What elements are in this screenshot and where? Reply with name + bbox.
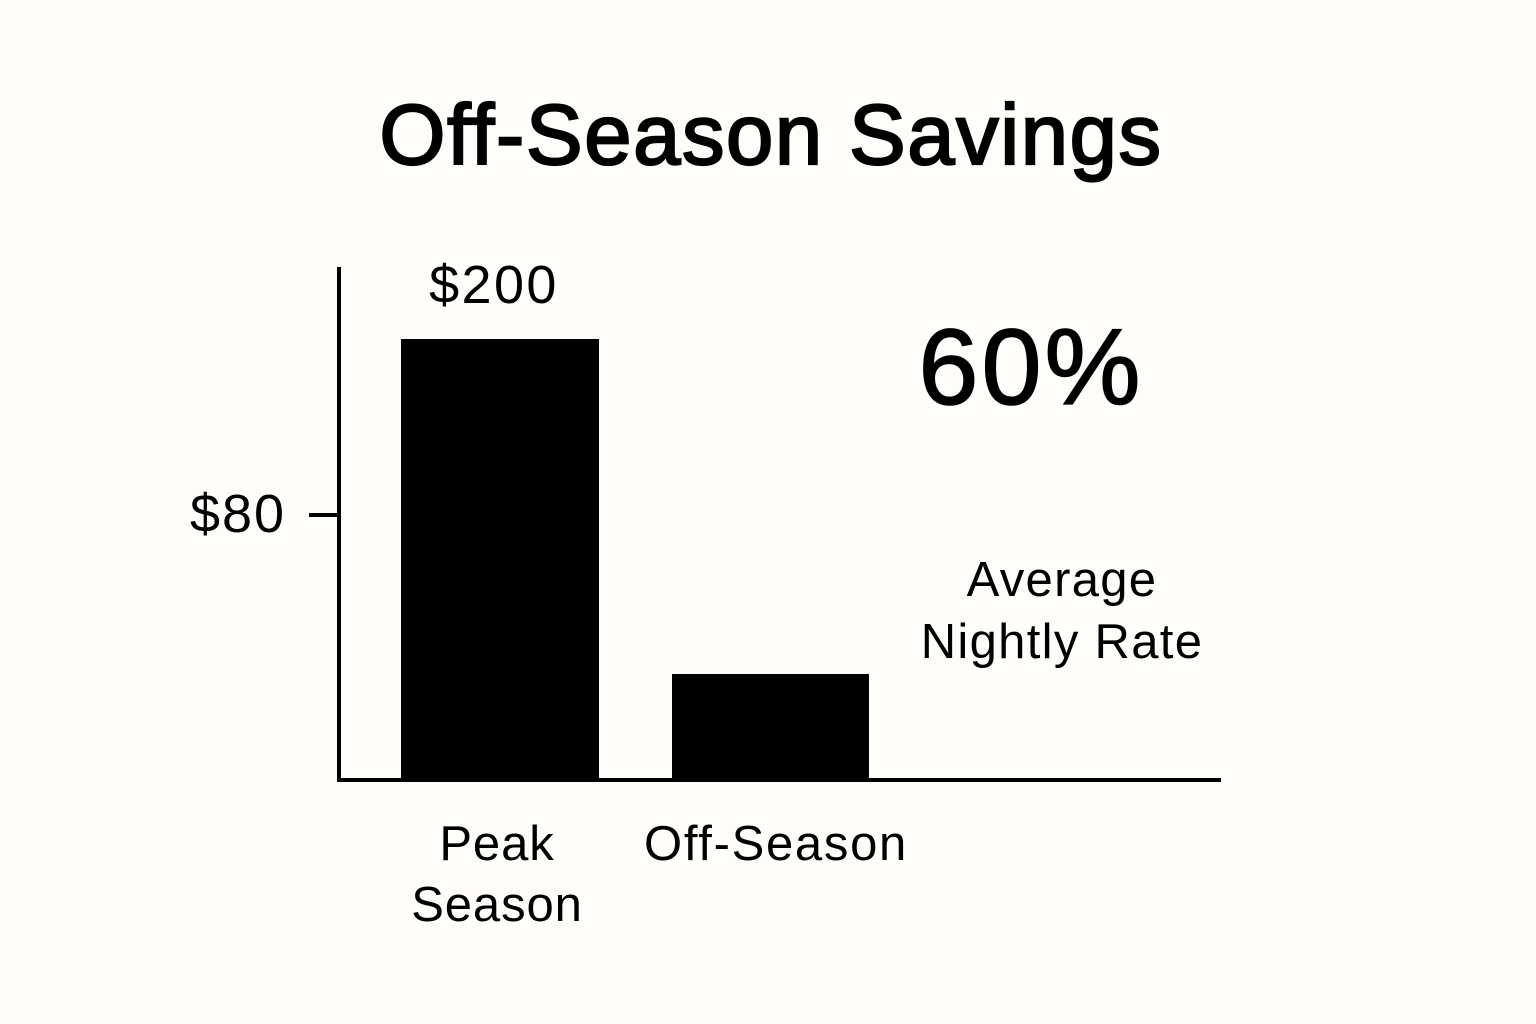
caption: average nightly rate: Nightly Rate [921, 615, 1203, 669]
y axis [337, 267, 341, 781]
caption: average nightly rate: Average [967, 553, 1157, 607]
caption: average nightly rate [921, 553, 1203, 669]
title: Off-Season Savings [379, 88, 1163, 183]
y tick label: $80 [190, 484, 286, 544]
bar chart [190, 255, 1221, 932]
bar: peak season [401, 339, 599, 781]
bar value label: $200 [429, 255, 559, 315]
category label: peak season [411, 817, 583, 932]
bar: off-season [672, 674, 869, 781]
category label: off-season: Off-Season [644, 817, 908, 871]
category label: peak season: Peak [439, 817, 555, 871]
category label: peak season: Season [411, 878, 583, 932]
callout: 60%: 60% [918, 306, 1144, 427]
y tick [309, 513, 339, 517]
x axis [337, 778, 1221, 782]
